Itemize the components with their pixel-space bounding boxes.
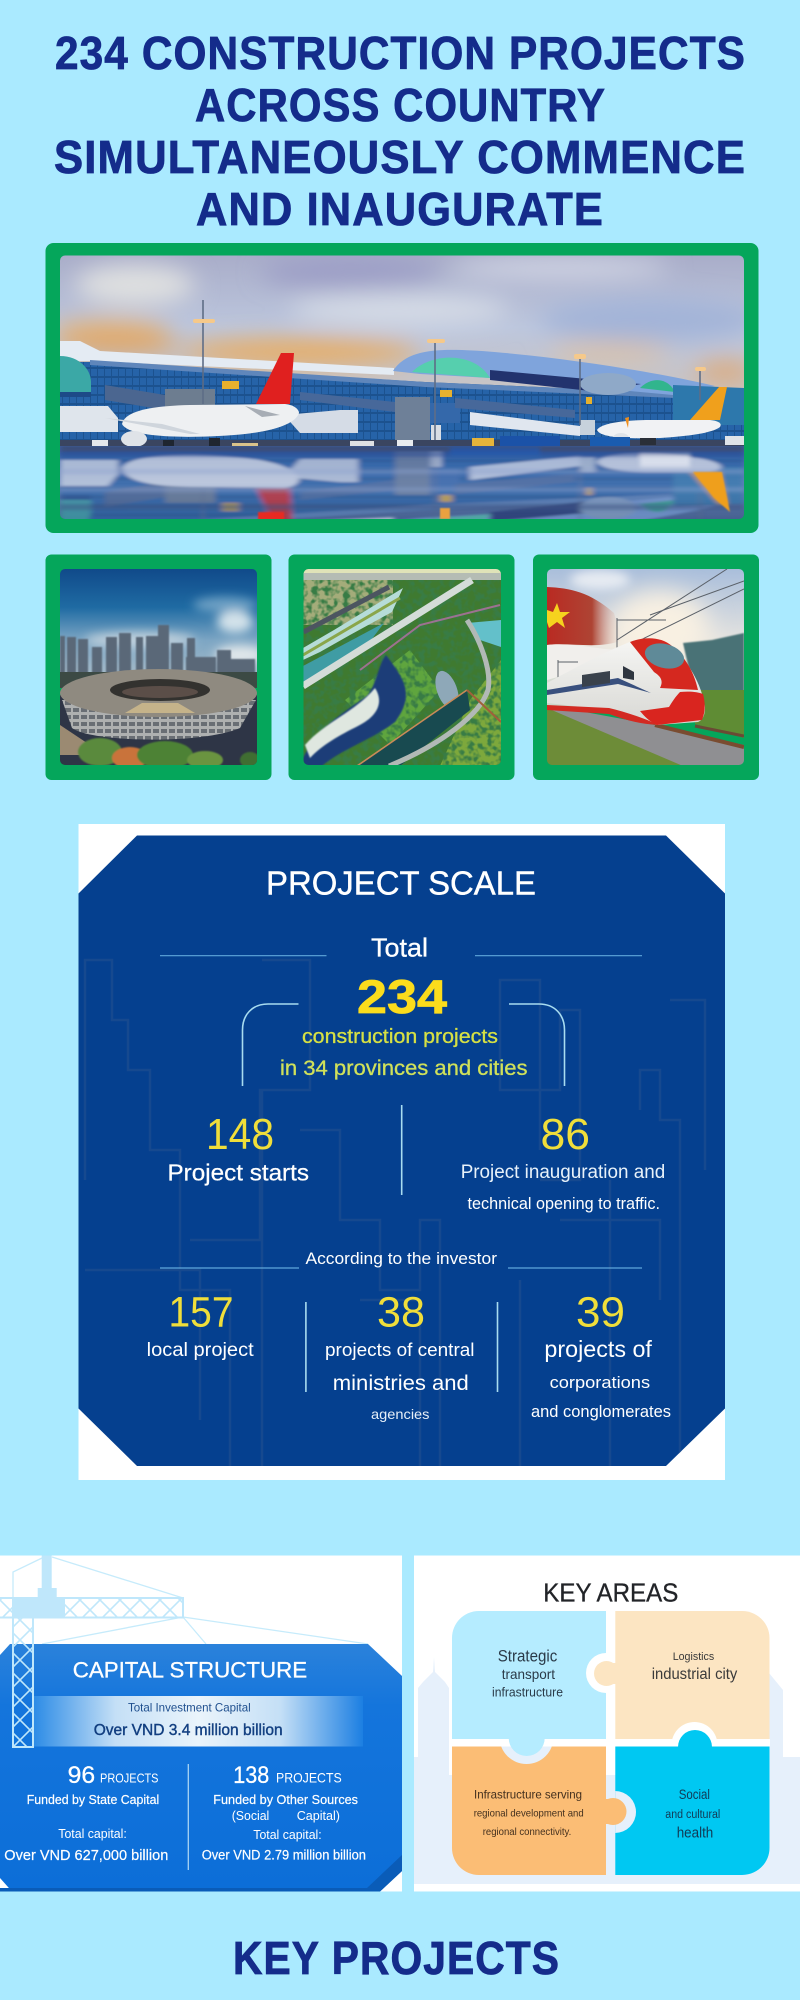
title: ACROSS COUNTRY: [195, 79, 606, 131]
stat: other sources: Funded by Other Sources: [213, 1792, 358, 1807]
stat: corporations: corporations: [550, 1373, 650, 1392]
total heading: Total: [371, 932, 428, 962]
skyline outline: [85, 960, 705, 1466]
total figure 234: 234: [357, 970, 447, 1023]
heading: capital structure: CAPITAL STRUCTURE: [73, 1658, 307, 1682]
stat: central ministries: 38: [377, 1288, 425, 1336]
panel: project scale: [78, 824, 725, 1480]
stat: central ministries: ministries and: [333, 1372, 469, 1395]
stat: local projects: [147, 1288, 254, 1361]
pond: [435, 670, 458, 705]
total figure 234: construction projects: [302, 1026, 498, 1048]
stat: state capital: Funded by State Capital: [27, 1792, 159, 1807]
stat: project starts: [168, 1110, 309, 1186]
puzzle piece: infrastructure: [452, 1746, 606, 1875]
heading: according to the investor: According to the investor: [306, 1249, 497, 1268]
total investment capital band: [33, 1696, 363, 1746]
labels: regional infrastructure: regional development and: [474, 1808, 584, 1820]
stat: central ministries: agencies: [371, 1406, 430, 1422]
skyline: [60, 624, 256, 672]
stat: project starts: Project starts: [168, 1160, 309, 1186]
labels: logistics industrial city: Logistics: [673, 1651, 715, 1663]
train cab red: [630, 638, 698, 690]
stat: state capital: Over VND 627,000 billion: [4, 1848, 168, 1864]
crane cables: [13, 1557, 368, 1644]
title: 234 CONSTRUCTION PROJECTS: [55, 27, 746, 79]
stat: other sources: PROJECTS: [276, 1770, 342, 1786]
train windscreen: [644, 643, 684, 669]
total investment capital band: Over VND 3.4 million billion: [94, 1722, 283, 1739]
title: SIMULTANEOUSLY COMMENCE: [54, 131, 746, 183]
labels: regional infrastructure: regional connectivity.: [483, 1827, 571, 1838]
catenary wires: [558, 569, 744, 685]
title: [54, 27, 746, 235]
labels: strategic transport infrastructure: transport: [502, 1666, 555, 1682]
labels: social cultural health: [665, 1787, 720, 1842]
train nose red: [640, 692, 705, 725]
stat: other sources: 138: [233, 1762, 269, 1789]
canal and paths: [357, 690, 470, 766]
flag: [547, 587, 622, 645]
stat: local projects: 157: [168, 1288, 234, 1336]
labels: social cultural health: health: [677, 1826, 713, 1842]
panel: key areas: [414, 1556, 800, 1892]
stat: central ministries: projects of central: [325, 1339, 474, 1360]
stat: project inauguration: technical opening to traffic.: [468, 1195, 660, 1213]
stat: other sources: Over VND 2.79 million billion: [202, 1848, 366, 1862]
stat: corporations: [531, 1288, 671, 1421]
stadium facade: [62, 700, 256, 740]
stat: other sources: [202, 1762, 366, 1862]
total figure 234: [280, 970, 528, 1080]
stat: other sources: Total capital:: [253, 1828, 322, 1842]
stat: project inauguration: 86: [540, 1110, 590, 1159]
wet apron reflections: [60, 446, 744, 519]
stat: local projects: local project: [147, 1340, 254, 1361]
light fixtures: [193, 319, 706, 371]
capital panel background: [0, 1644, 402, 1892]
gravel and rail: [552, 710, 744, 765]
stadium roof: [60, 669, 257, 717]
bracket connectors: [242, 1004, 564, 1086]
stat: state capital: [4, 1762, 168, 1864]
labels: social cultural health: and cultural: [665, 1809, 720, 1821]
crane: [0, 1556, 183, 1747]
stat: corporations: 39: [576, 1288, 625, 1336]
ground vehicles: [92, 436, 744, 446]
puzzle piece: social and cultural: [615, 1730, 770, 1875]
stat: state capital: Total capital:: [58, 1827, 127, 1841]
winding stream: [303, 655, 406, 766]
stat: state capital: PROJECTS: [100, 1770, 159, 1786]
mountains: [683, 633, 744, 695]
stat: state capital: 96: [68, 1762, 95, 1789]
labels: social cultural health: Social: [679, 1787, 710, 1802]
photo panel: stadium: [46, 554, 272, 780]
heading: project scale: PROJECT SCALE: [266, 864, 536, 902]
water channels: [303, 588, 403, 660]
grass foreground: [547, 710, 680, 765]
field: [695, 690, 744, 738]
stat: project inauguration: Project inauguration and: [461, 1162, 665, 1183]
stat: project starts: 148: [206, 1110, 274, 1159]
stat: other sources: Capital): [297, 1808, 340, 1823]
terminal building, planes and jet bridges: [60, 300, 744, 446]
title: AND INAUGURATE: [196, 183, 604, 235]
labels: strategic transport infrastructure: [492, 1648, 563, 1700]
labels: logistics industrial city: [652, 1651, 738, 1683]
train body: [547, 638, 705, 725]
stat: project inauguration: [461, 1110, 665, 1213]
city silhouette: [414, 1657, 800, 1884]
labels: regional infrastructure: Infrastructure serving: [474, 1788, 582, 1802]
heading: key areas: KEY AREAS: [543, 1580, 678, 1608]
puzzle piece: strategic transport: [452, 1611, 606, 1739]
total figure 234: in 34 provinces and cities: [280, 1057, 528, 1080]
expressway: [303, 580, 472, 686]
labels: regional infrastructure: [474, 1788, 584, 1838]
puzzle connector tabs: [509, 1720, 626, 1825]
photo panel: airport terminal: [46, 243, 758, 533]
ground: [60, 695, 257, 766]
trees: [77, 737, 257, 765]
labels: logistics industrial city: industrial city: [652, 1666, 738, 1683]
stat: other sources: (Social: [232, 1808, 269, 1823]
airplane details: [105, 406, 656, 448]
puzzle piece: logistics: [594, 1611, 770, 1739]
total investment capital band: Total Investment Capital: [128, 1700, 251, 1714]
stat: corporations: projects of: [544, 1336, 653, 1362]
panel: capital structure: [0, 1556, 402, 1892]
labels: strategic transport infrastructure: infrastructure: [492, 1684, 563, 1700]
photo panel: riverside park and expressway: [288, 554, 514, 780]
stat: corporations: and conglomerates: [531, 1402, 671, 1421]
stat: central ministries: [325, 1288, 474, 1422]
labels: strategic transport infrastructure: Strategic: [498, 1648, 557, 1666]
photo panel: high speed train: [533, 554, 759, 780]
heading: key projects: KEY PROJECTS: [233, 1932, 560, 1984]
